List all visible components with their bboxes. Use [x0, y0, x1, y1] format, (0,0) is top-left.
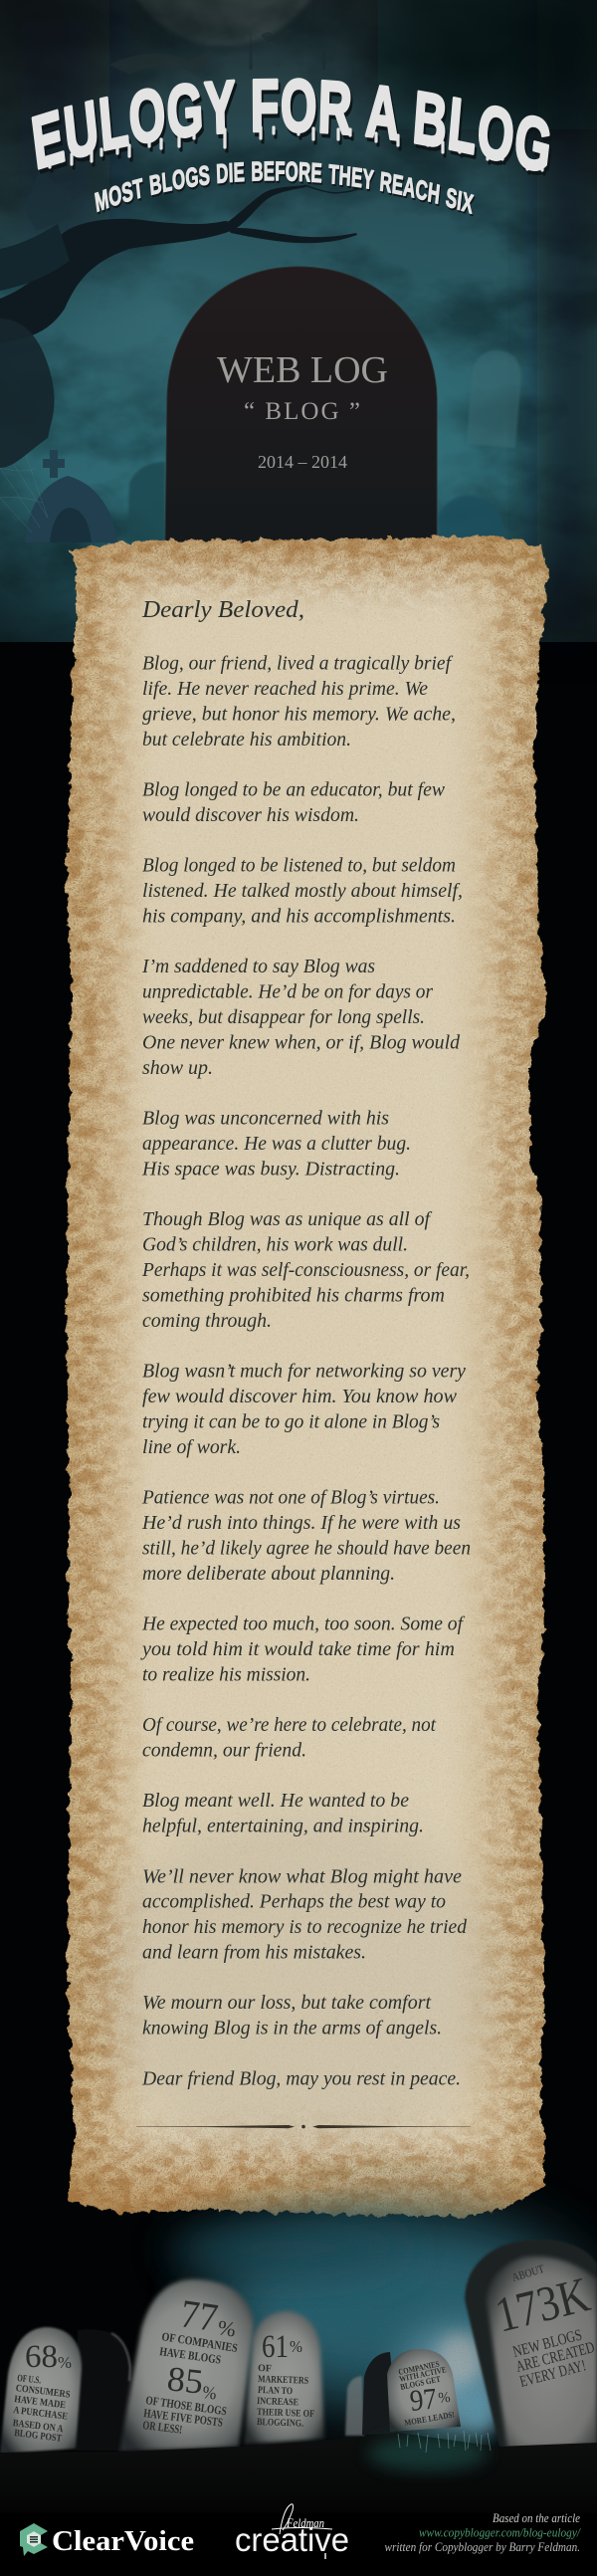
- paragraph 3: [142, 855, 463, 928]
- lower graveyard glow: [149, 2215, 597, 2459]
- caption: companies with active blogs: [397, 2358, 448, 2392]
- paragraph 1: grieve, but honor his memory. We ache,: [142, 703, 456, 725]
- logo: ClearVoice: [20, 2523, 194, 2557]
- tombstone: 97 percent: [345, 2349, 461, 2436]
- caption: 61%: PLAN TO: [258, 2385, 293, 2397]
- paragraph 13: knowing Blog is in the arms of angels.: [142, 2018, 442, 2039]
- credits: Based on the article: [493, 2510, 580, 2525]
- caption: 68%: HAVE MADE: [14, 2394, 67, 2411]
- caption: companies with active blogs: WITH ACTIVE: [398, 2364, 448, 2384]
- caption: 68%: CONSUMERS: [15, 2383, 71, 2401]
- paragraph 5: appearance. He was a clutter bug.: [142, 1133, 411, 1155]
- paragraph 2: [142, 778, 445, 826]
- paragraph 8: He’d rush into things. If he were with us: [141, 1512, 461, 1534]
- paragraph 6: [141, 1208, 470, 1332]
- caption: 68%: A PURCHASE: [13, 2405, 69, 2423]
- paragraph 12: [142, 1865, 468, 1963]
- paragraph 6: Perhaps it was self-consciousness, or fear,: [141, 1259, 470, 1281]
- lead-in: about: ABOUT: [510, 2263, 545, 2284]
- paragraph 1: but celebrate his ambition.: [142, 729, 351, 751]
- stat: 97%: 97: [408, 2382, 439, 2418]
- credits: [384, 2510, 581, 2554]
- paragraph 6: coming through.: [142, 1310, 272, 1332]
- eulogy text: Dearly Beloved,: [141, 597, 304, 623]
- paragraph 5: Blog was unconcerned with his: [142, 1107, 389, 1129]
- wordmark: ClearVoice: [52, 2525, 194, 2557]
- caption: 61%: MARKETERS: [258, 2374, 309, 2387]
- caption: companies with blogs: [159, 2329, 239, 2367]
- paragraph 3: his company, and his accomplishments.: [142, 906, 456, 928]
- distant church and bat silhouettes: [109, 28, 325, 75]
- paragraph 5: [141, 1107, 411, 1180]
- paragraph 12: We’ll never know what Blog might have: [142, 1865, 462, 1887]
- caption: companies with blogs: HAVE BLOGS: [159, 2344, 222, 2367]
- paragraph 4: [141, 956, 461, 1079]
- paragraph 12: and learn from his mistakes.: [142, 1941, 366, 1963]
- paragraph 11: helpful, entertaining, and inspiring.: [142, 1816, 424, 1837]
- paragraph 7: few would discover him. You know how: [142, 1386, 457, 1407]
- caption: companies with active blogs: BLOGS GET: [399, 2374, 442, 2392]
- paragraph 4: unpredictable. He’d be on for days or: [142, 981, 434, 1003]
- paragraph 3: listened. He talked mostly about himself,: [142, 880, 463, 902]
- paragraph 11: Blog meant well. He wanted to be: [142, 1790, 409, 1812]
- paragraph 6: God’s children, his work was dull.: [142, 1234, 408, 1256]
- paragraph 6: something prohibited his charms from: [142, 1284, 445, 1306]
- paragraph 4: One never knew when, or if, Blog would: [142, 1031, 461, 1053]
- paragraph 8: [141, 1487, 471, 1585]
- paragraph 10: condemn, our friend.: [142, 1740, 306, 1762]
- stat: 77%: 77: [178, 2290, 221, 2340]
- caption: 61%: OF: [258, 2363, 272, 2374]
- tombstone: 61 percent: [244, 2311, 324, 2445]
- eulogy text: [140, 597, 471, 2089]
- paragraph 2: Blog longed to be an educator, but few: [142, 778, 445, 800]
- moon: [120, 0, 327, 46]
- paragraph 7: Blog wasn’t much for networking so very: [142, 1360, 467, 1382]
- subtitle: most blogs die before they reach six: MOST BLOGS DIE BEFORE THEY REACH SIX: [94, 161, 476, 217]
- footer band: [0, 2513, 597, 2576]
- caption: 68%: OF U.S.: [17, 2373, 42, 2387]
- paragraph 13: We mourn our loss, but take comfort: [142, 1992, 432, 2014]
- logo: Feldman Creative: [235, 2504, 349, 2559]
- caption: companies with active blogs: COMPANIES: [397, 2358, 441, 2377]
- caption: 68%: BLOG POST: [14, 2428, 63, 2445]
- ornamental rule: [136, 2125, 471, 2128]
- paragraph 13: [142, 1992, 442, 2039]
- stat: 97%: %: [438, 2390, 451, 2407]
- caption: five posts or less: OR LESS!: [142, 2418, 183, 2437]
- paragraph 4: weeks, but disappear for long spells.: [142, 1006, 425, 1028]
- main tombstone: [165, 267, 437, 549]
- tombstone: 68 percent: [0, 2327, 131, 2454]
- tombstone: 77 and 85 percent: [119, 2279, 254, 2452]
- paragraph 4: I’m saddened to say Blog was: [141, 956, 375, 977]
- tombstone: 173K per day: [465, 2240, 597, 2451]
- caption: five posts or less: [142, 2393, 228, 2437]
- background graves: [25, 350, 521, 542]
- paragraph 12: accomplished. Perhaps the best way to: [142, 1891, 446, 1913]
- epitaph: blog: “ BLOG ”: [244, 398, 360, 425]
- caption: 61%: INCREASE: [257, 2396, 299, 2408]
- closing line: Dear friend Blog, may you rest in peace.: [141, 2067, 461, 2089]
- caption: 61%: THEIR USE OF: [257, 2407, 314, 2420]
- paragraph 8: Patience was not one of Blog’s virtues.: [141, 1487, 440, 1509]
- wordmark: creative: [235, 2521, 349, 2558]
- paragraph 7: [142, 1360, 467, 1458]
- paragraph 9: to realize his mission.: [142, 1663, 310, 1685]
- paragraph 2: would discover his wisdom.: [142, 804, 359, 826]
- signature: Feldman: [286, 2515, 324, 2530]
- caption: 68%: BASED ON A: [12, 2418, 65, 2435]
- paragraph 3: Blog longed to be listened to, but seldom: [142, 855, 456, 877]
- paragraph 1: life. He never reached his prime. We: [142, 678, 428, 700]
- paragraph 11: [142, 1790, 424, 1837]
- epitaph: dates: 2014 – 2014: [258, 452, 347, 472]
- caption: 61%: BLOGGING.: [257, 2417, 304, 2430]
- paragraph 10: Of course, we’re here to celebrate, not: [142, 1714, 437, 1736]
- stat: 85%: %: [202, 2382, 218, 2403]
- caption: new blogs created: [511, 2327, 596, 2391]
- stat: 85%: 85: [165, 2359, 205, 2402]
- spider web: [0, 438, 48, 533]
- stat: 61%: 61: [262, 2329, 289, 2365]
- dead tree: [0, 169, 363, 468]
- title: eulogy for a blog: EULOGY FOR A BLOG: [32, 78, 551, 175]
- paragraph 8: still, he’d likely agree he should have been: [142, 1537, 471, 1559]
- stat: 68%: 68: [25, 2339, 58, 2375]
- ground and grass: [0, 2431, 597, 2514]
- paragraph 1: [142, 653, 456, 751]
- parchment: [64, 534, 549, 2219]
- stat: 61%: %: [290, 2337, 302, 2356]
- paragraph 4: show up.: [142, 1057, 213, 1079]
- paragraph 9: He expected too much, too soon. Some of: [141, 1612, 466, 1634]
- epitaph: web log: WEB LOG: [217, 349, 388, 391]
- caption: 61%: [257, 2363, 314, 2430]
- icon: hexagon speech badge: [20, 2523, 48, 2556]
- paragraph 5: His space was busy. Distracting.: [141, 1158, 400, 1180]
- stat: 68%: %: [58, 2353, 72, 2372]
- caption: more leads: MORE LEADS!: [404, 2409, 456, 2428]
- paragraph 10: [142, 1714, 437, 1762]
- stat: 77%: %: [216, 2315, 237, 2341]
- paragraph 1: Blog, our friend, lived a tragically brief: [142, 653, 454, 675]
- caption: five posts or less: OF THOSE BLOGS: [145, 2393, 228, 2418]
- paragraph 12: honor his memory is to recognize he tried: [142, 1916, 468, 1938]
- caption: 68%: [12, 2373, 71, 2445]
- paragraph 7: line of work.: [142, 1436, 241, 1458]
- paragraph 9: [140, 1612, 466, 1685]
- caption: five posts or less: HAVE FIVE POSTS: [143, 2406, 224, 2430]
- paragraph 8: more deliberate about planning.: [142, 1563, 395, 1585]
- paragraph 7: trying it can be to go it alone in Blog’s: [142, 1410, 440, 1432]
- caption: companies with blogs: OF COMPANIES: [161, 2329, 239, 2355]
- paragraph 9: you told him it would take time for him: [140, 1638, 455, 1660]
- graveyard sky scene: [0, 0, 597, 642]
- paragraph 6: Though Blog was as unique as all of: [142, 1208, 433, 1230]
